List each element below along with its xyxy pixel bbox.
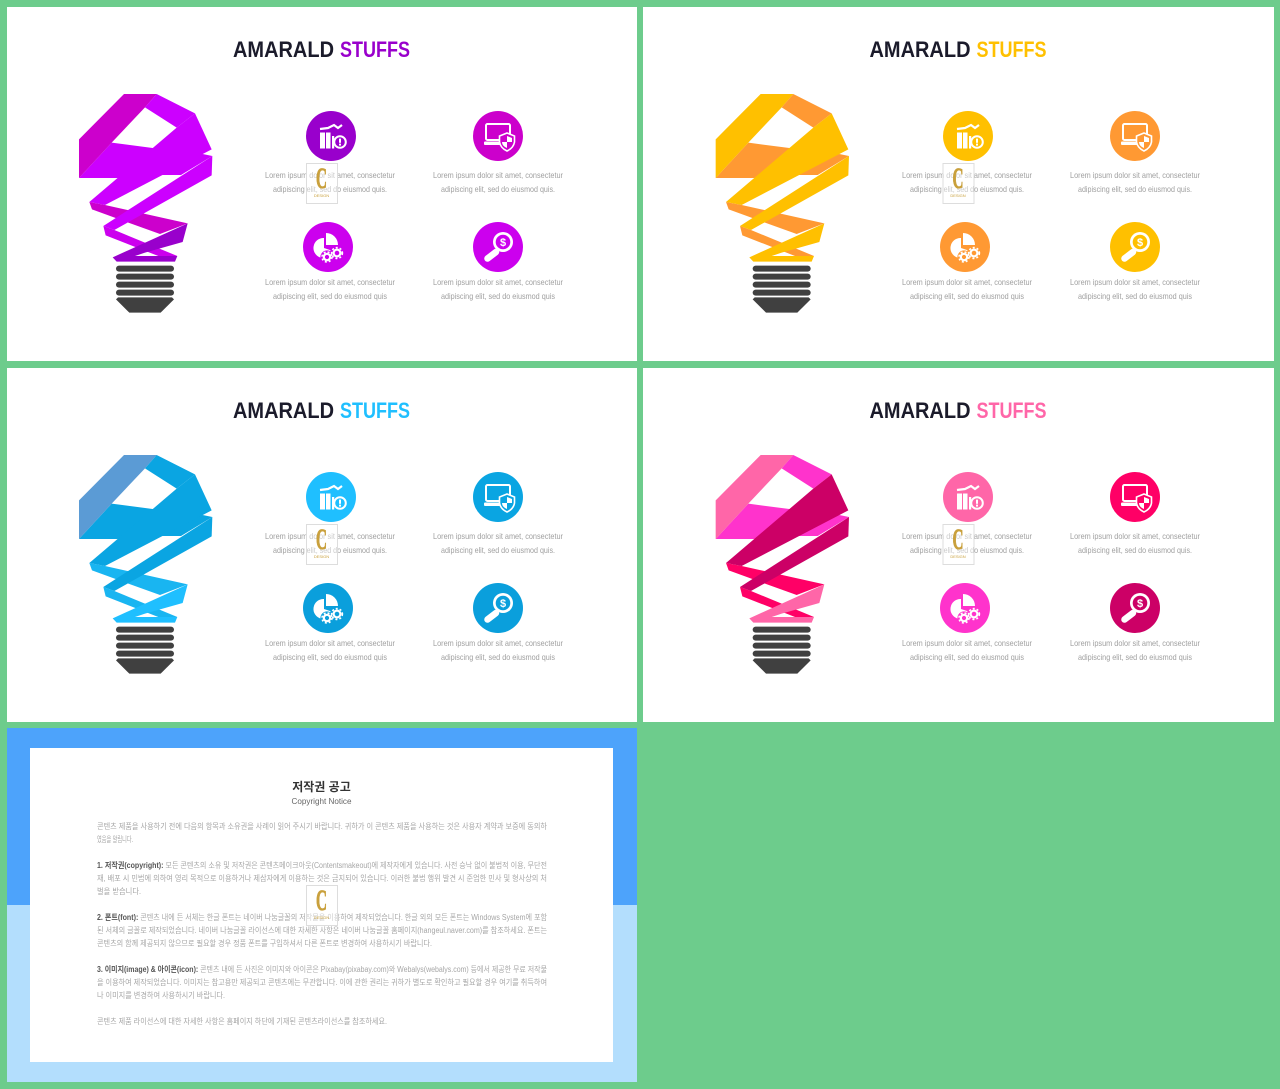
- text block: bottom left: Lorem ipsum dolor sit amet, consectetur: [265, 277, 395, 287]
- section: font: 콘텐츠의 함께 제공되지 않으므로 필요할 경우 정품 폰트를 구입하셔서 다른 폰트로 변경하여 사용하시기 바랍니다.: [97, 938, 432, 948]
- text block: bottom left: Lorem ipsum dolor sit amet, consectetur: [265, 638, 395, 648]
- bulb illustration: [716, 94, 849, 313]
- watermark: C: [316, 523, 327, 556]
- title: AMARALD: [870, 398, 970, 423]
- section: copyright: [97, 860, 547, 896]
- watermark: DESIGN: [314, 554, 329, 559]
- text block: bottom right: [1070, 277, 1200, 301]
- text block: bottom left: [265, 277, 395, 301]
- text block: bottom right: adipiscing elit, sed do eiusmod quis: [441, 291, 555, 301]
- text block: top right: adipiscing elit, sed do eiusmod quis.: [441, 545, 555, 555]
- section: image and icon: 을 이용하여 제작되었습니다. 이미지는 참고용만 제공되고 콘텐츠에는 무관합니다. 이에 관한 권리는 귀하가 별도로 확인하고 필요할 경우 여기를 취득하여: [97, 977, 547, 987]
- watermark: C: [316, 884, 327, 917]
- text block: top right: Lorem ipsum dolor sit amet, consectetur: [433, 170, 563, 180]
- icon: pie gears: [303, 222, 353, 272]
- text block: top left: adipiscing elit, sed do eiusmod quis.: [273, 545, 387, 555]
- text block: top left: adipiscing elit, sed do eiusmod quis.: [910, 184, 1024, 194]
- title: STUFFS: [340, 37, 410, 62]
- icon: money search: [473, 222, 523, 272]
- title: [233, 37, 410, 62]
- watermark: DESIGN: [314, 193, 329, 198]
- text block: bottom right: adipiscing elit, sed do eiusmod quis: [1078, 652, 1192, 662]
- icon: money search: $: [500, 598, 506, 610]
- text block: top left: [902, 170, 1032, 194]
- text block: top left: Lorem ipsum dolor sit amet, consectetur: [902, 531, 1032, 541]
- text block: bottom left: adipiscing elit, sed do eiusmod quis: [910, 652, 1024, 662]
- text block: top left: [265, 531, 395, 555]
- text block: bottom left: [902, 638, 1032, 662]
- notice heading: Copyright Notice: [292, 796, 352, 806]
- title: STUFFS: [340, 398, 410, 423]
- icon: laptop shield: [473, 111, 523, 161]
- panel: pink bulb slide: [643, 368, 1274, 722]
- text block: bottom left: adipiscing elit, sed do eiusmod quis: [273, 291, 387, 301]
- icon: laptop shield: [1110, 472, 1160, 522]
- text block: top right: adipiscing elit, sed do eiusmod quis.: [1078, 545, 1192, 555]
- panel: yellow bulb slide: [643, 7, 1274, 361]
- title: [233, 398, 410, 423]
- text block: top left: [265, 170, 395, 194]
- watermark: [306, 523, 338, 564]
- section: copyright: 벌을 받습니다.: [97, 886, 141, 896]
- icon: chart alert: [306, 111, 356, 161]
- text block: top right: [1070, 531, 1200, 555]
- section: copyright: 1. 저작권(copyright): 모든 콘텐츠의 소유 및 저작권은 콘텐츠메이크아웃(Contentsmakeout)에 제작자에게 있습니다. 사전 승낙 없이 불법적 이용, 무단전: [97, 860, 547, 870]
- text block: top right: [433, 170, 563, 194]
- watermark: C: [316, 162, 327, 195]
- icon: pie gears: [940, 583, 990, 633]
- icon: money search: [473, 583, 523, 633]
- text block: bottom right: Lorem ipsum dolor sit amet, consectetur: [1070, 638, 1200, 648]
- text block: top left: adipiscing elit, sed do eiusmod quis.: [273, 184, 387, 194]
- text block: bottom left: adipiscing elit, sed do eiusmod quis: [273, 652, 387, 662]
- text block: bottom right: Lorem ipsum dolor sit amet, consectetur: [433, 638, 563, 648]
- title: [870, 37, 1046, 62]
- icon: chart alert: [943, 472, 993, 522]
- title: STUFFS: [976, 37, 1046, 62]
- title: [870, 398, 1046, 423]
- watermark: DESIGN: [314, 915, 329, 920]
- icon: chart alert: [306, 472, 356, 522]
- text block: bottom right: adipiscing elit, sed do eiusmod quis: [1078, 291, 1192, 301]
- icon: money search: $: [1137, 598, 1143, 610]
- text block: bottom right: Lorem ipsum dolor sit amet, consectetur: [433, 277, 563, 287]
- panel: purple bulb slide: [7, 7, 637, 361]
- text block: bottom right: [1070, 638, 1200, 662]
- text block: top left: Lorem ipsum dolor sit amet, consectetur: [902, 170, 1032, 180]
- bulb illustration: [79, 455, 212, 674]
- watermark: DESIGN: [950, 554, 966, 559]
- section: font: 2. 폰트(font): 콘텐츠 내에 든 서체는 한글 폰트는 네이버 나눔글꼴의 저작물을 이용하여 제작되었습니다. 한글 외의 모든 폰트는 Windows System에 포함: [97, 912, 548, 922]
- bulb illustration: [716, 455, 849, 674]
- section: font: 된 서체의 글꼴로 제작되었습니다. 네이버 나눔글꼴 라이선스에 대한 자세한 사항은 네이버 나눔글꼴 홈페이지(hangeul.naver.com)를 참조하세요. 폰트는: [97, 925, 547, 935]
- text block: top right: [433, 531, 563, 555]
- title: AMARALD: [233, 37, 334, 62]
- icon: chart alert: [943, 111, 993, 161]
- text block: bottom right: Lorem ipsum dolor sit amet, consectetur: [1070, 277, 1200, 287]
- panel: copyright notice: [7, 728, 637, 1082]
- text block: top right: [1070, 170, 1200, 194]
- text block: bottom right: adipiscing elit, sed do eiusmod quis: [441, 652, 555, 662]
- bulb illustration: [79, 94, 212, 313]
- section: copyright: 재, 배포 시 민법에 의하여 영리 목적으로 이용하거나 제삼자에게 이용하는 것은 금지되어 있습니다. 이러한 불법 행위 발견 시 준엄한 민사 및 형사상의 처: [97, 873, 547, 883]
- watermark: [306, 884, 338, 926]
- text block: top right: adipiscing elit, sed do eiusmod quis.: [1078, 184, 1192, 194]
- text block: top right: Lorem ipsum dolor sit amet, consectetur: [1070, 531, 1200, 541]
- text block: bottom right: [433, 277, 563, 301]
- icon: laptop shield: [473, 472, 523, 522]
- notice heading: 저작권 공고: [292, 779, 351, 794]
- text block: top left: adipiscing elit, sed do eiusmod quis.: [910, 545, 1024, 555]
- text block: bottom left: Lorem ipsum dolor sit amet, consectetur: [902, 277, 1032, 287]
- notice heading: [292, 779, 352, 806]
- icon: money search: [1110, 583, 1160, 633]
- watermark: DESIGN: [950, 193, 966, 198]
- watermark: C: [952, 523, 964, 556]
- text block: top right: Lorem ipsum dolor sit amet, consectetur: [1070, 170, 1200, 180]
- section: image and icon: 3. 이미지(image) & 아이콘(icon): 콘텐츠 내에 든 사진은 이미지와 아이콘은 Pixabay(pixabay.com)와 Webalys(webalys.com) 등에서 제공한 무료 저작물: [97, 964, 547, 974]
- panel: blue bulb slide: [7, 368, 637, 722]
- intro paragraph: 콘텐츠 제품을 사용하기 전에 다음의 항목과 소유권을 사례이 읽어 주시기 바랍니다. 귀하가 이 콘텐츠 제품을 사용하는 것은 사용자 계약과 보증에 동의하: [97, 821, 548, 831]
- text block: bottom left: adipiscing elit, sed do eiusmod quis: [910, 291, 1024, 301]
- watermark: C: [952, 162, 964, 195]
- icon: money search: [1110, 222, 1160, 272]
- icon: pie gears: [303, 583, 353, 633]
- icon: money search: $: [1137, 237, 1143, 249]
- icon: pie gears: [940, 222, 990, 272]
- intro paragraph: 였음을 알립니다.: [97, 834, 133, 844]
- section: image and icon: 나 이미지를 변경하여 사용하시기 바랍니다.: [97, 990, 225, 1000]
- section: font: [97, 912, 548, 948]
- text block: bottom left: [265, 638, 395, 662]
- watermark: [943, 162, 974, 204]
- text block: bottom left: Lorem ipsum dolor sit amet, consectetur: [902, 638, 1032, 648]
- icon: laptop shield: [1110, 111, 1160, 161]
- watermark: [306, 162, 338, 204]
- closing line: 콘텐츠 제품 라이선스에 대한 자세한 사항은 홈페이지 하단에 기재된 콘텐츠라이선스를 참조하세요.: [97, 1016, 387, 1026]
- section: image and icon: [97, 964, 547, 1000]
- title: AMARALD: [870, 37, 970, 62]
- text block: bottom left: [902, 277, 1032, 301]
- title: AMARALD: [233, 398, 334, 423]
- text block: bottom right: [433, 638, 563, 662]
- text block: top left: [902, 531, 1032, 555]
- text block: top left: Lorem ipsum dolor sit amet, consectetur: [265, 531, 395, 541]
- text block: top right: adipiscing elit, sed do eiusmod quis.: [441, 184, 555, 194]
- title: STUFFS: [976, 398, 1046, 423]
- text block: top left: Lorem ipsum dolor sit amet, consectetur: [265, 170, 395, 180]
- watermark: [943, 523, 974, 564]
- text block: top right: Lorem ipsum dolor sit amet, consectetur: [433, 531, 563, 541]
- icon: money search: $: [500, 237, 506, 249]
- intro paragraph: [97, 821, 548, 844]
